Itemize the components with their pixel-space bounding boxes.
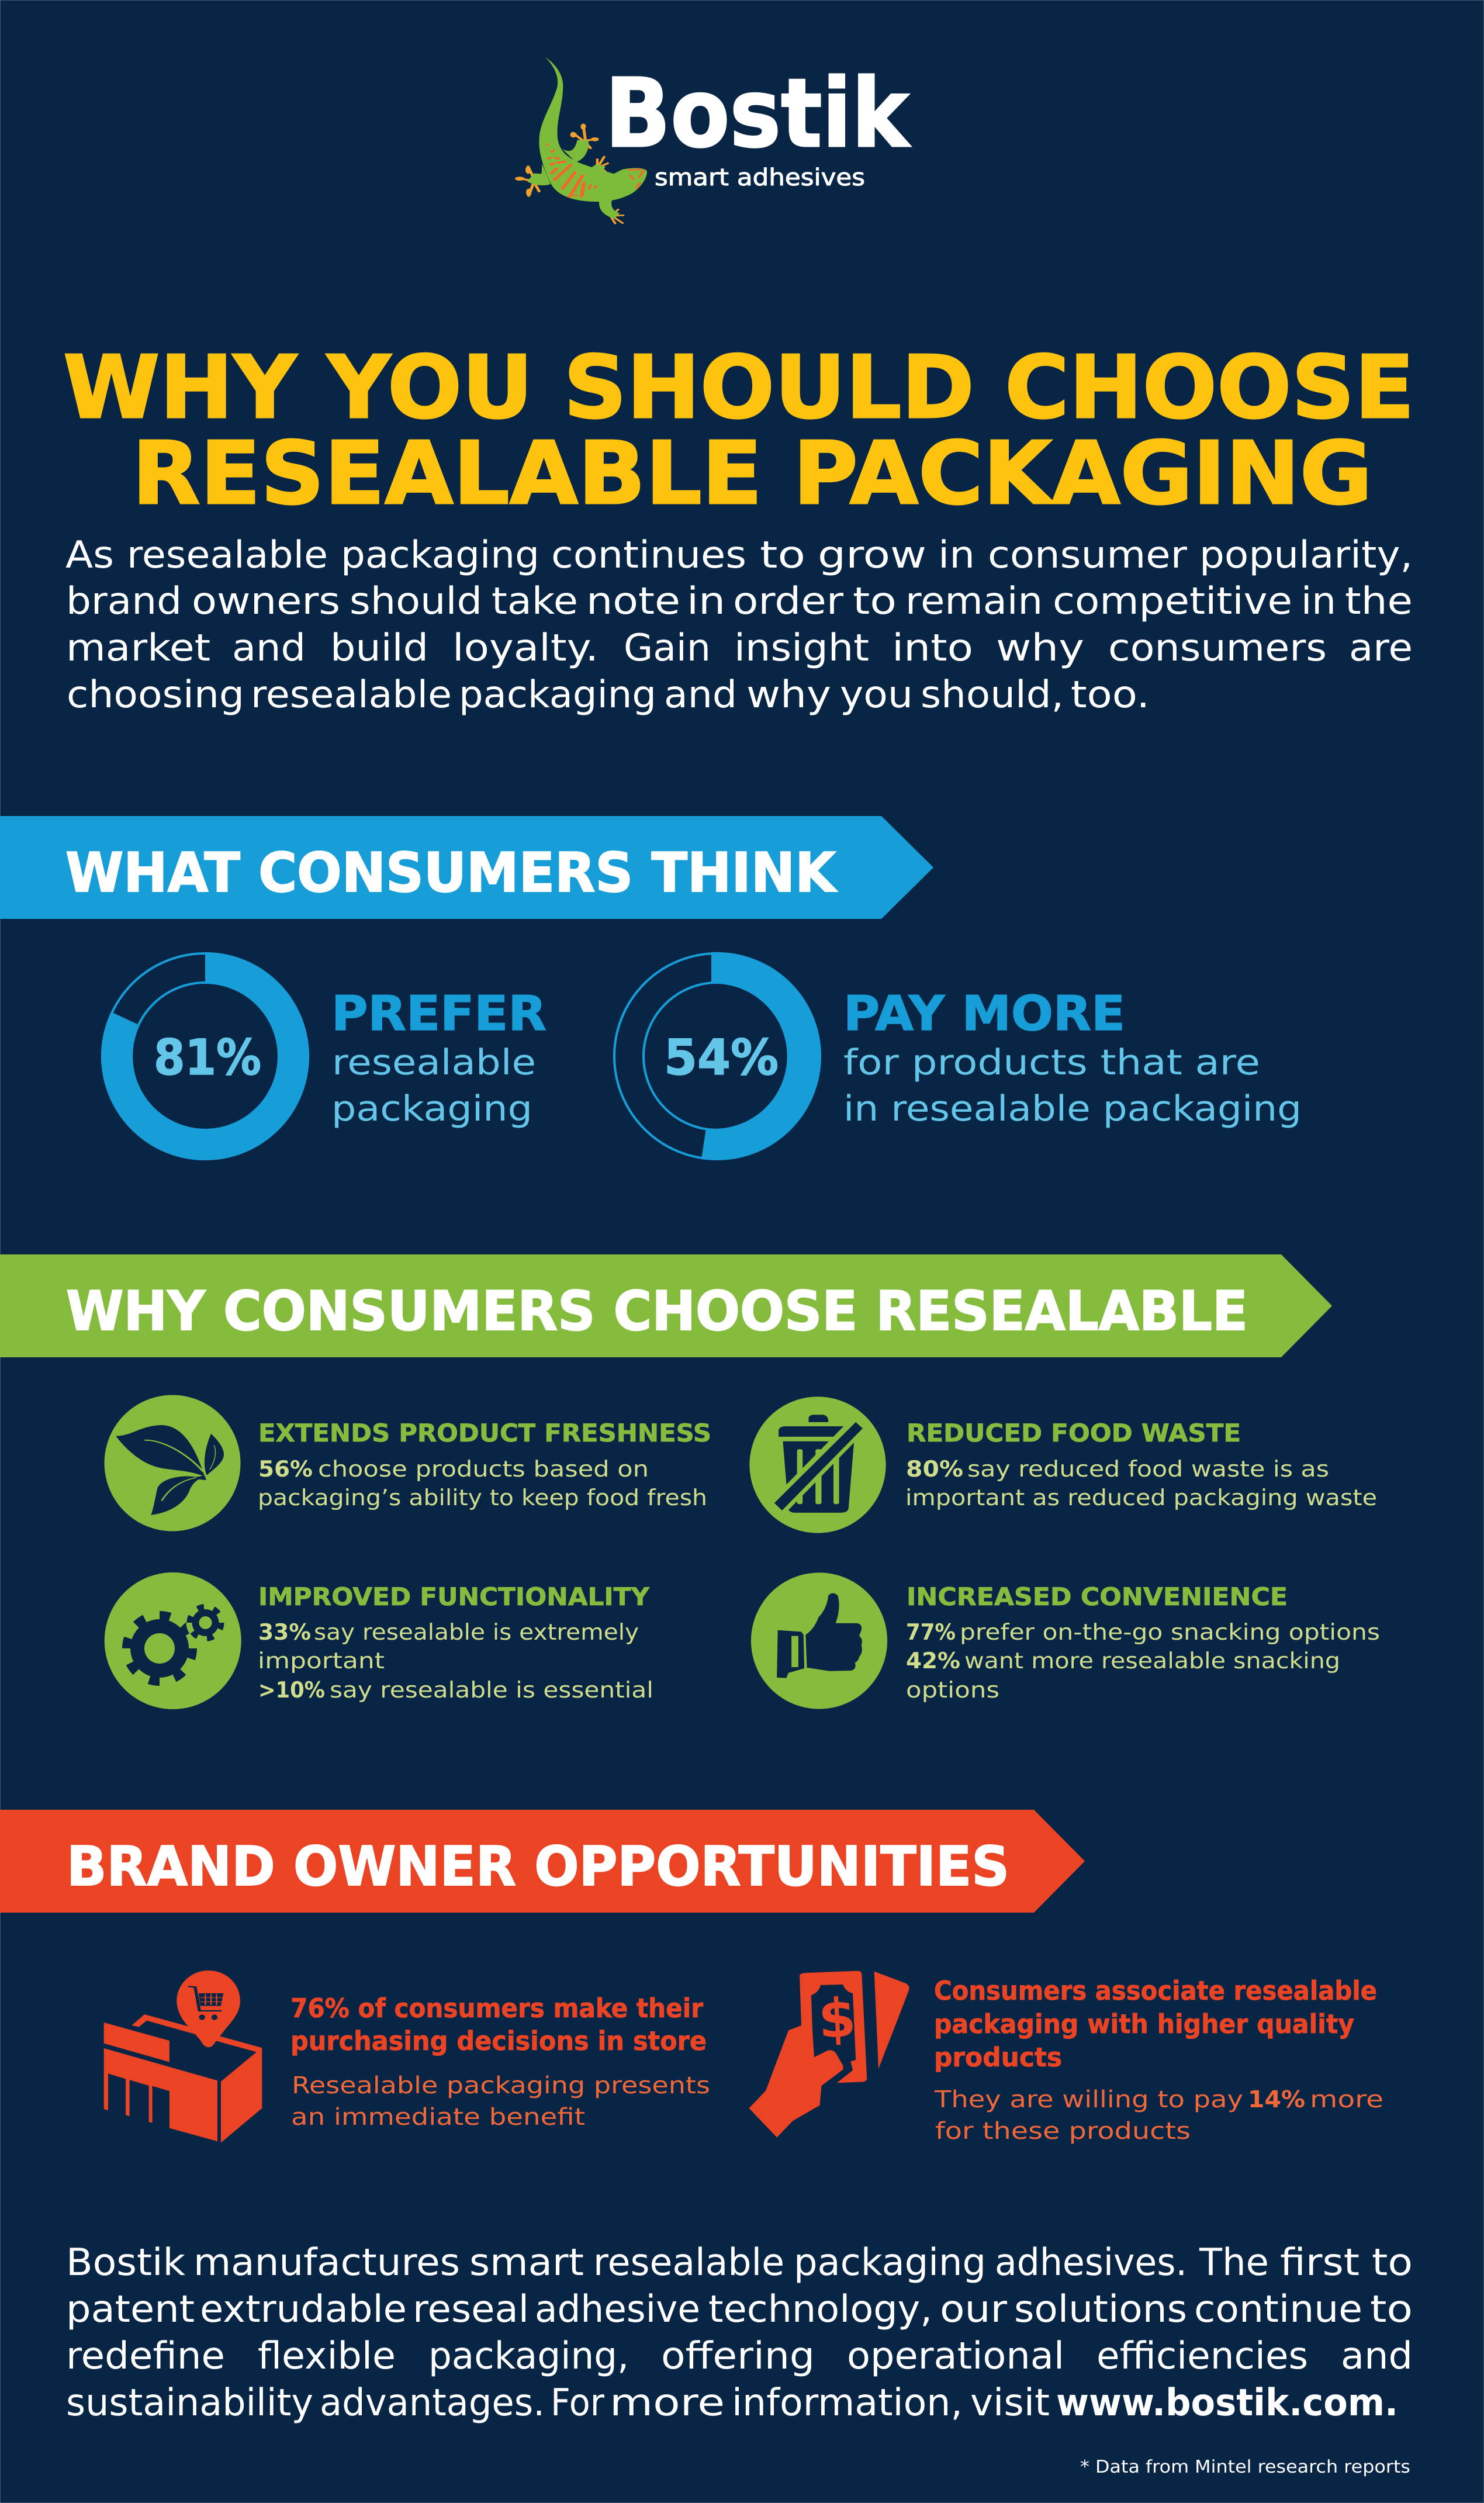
text: improved functionality: >10% [258,1677,325,1703]
closing paragraph [66,2241,1413,2425]
panel: prefer stat [101,952,546,1160]
intro paragraph: the [1345,580,1413,623]
text: quality association: for these products [935,2118,1191,2145]
closing paragraph: packaging [794,2241,986,2284]
closing paragraph: first [1280,2241,1360,2284]
closing paragraph: efficiencies [1096,2335,1308,2378]
intro paragraph: should, [921,673,1064,717]
intro paragraph: competitive [1053,580,1292,623]
text: in store decisions: an immediate benefit [291,2104,585,2131]
text: quality association: 14% [1248,2086,1305,2113]
intro paragraph: to [760,534,805,577]
intro paragraph: and [664,673,737,717]
intro paragraph: grow [818,534,926,577]
text: improved functionality: say resealable is essential [330,1677,653,1703]
intro paragraph: brand [66,580,182,623]
intro paragraph: consumers [1108,627,1327,670]
intro paragraph: owners [192,580,340,623]
stat label: pay more [843,986,1302,1129]
intro paragraph: into [892,627,973,670]
text: reduced food waste: important as reduced packaging waste [905,1485,1377,1510]
intro paragraph: continues [551,534,746,577]
text: increased convenience: 42% [906,1648,960,1674]
text: extends product freshness: packaging’s ability to keep food fresh [258,1485,707,1510]
intro paragraph: should [350,580,482,623]
closing paragraph: more [610,2381,725,2425]
panel: increased convenience [751,1572,1380,1709]
closing paragraph: information, [732,2381,963,2425]
panel: reduced food waste [749,1396,1377,1533]
section banner: what consumers think [0,816,933,919]
text: improved functionality: say resealable is extremely [314,1619,639,1645]
intro paragraph: insight [734,627,869,670]
icon: crossed out trash can [749,1396,886,1533]
text: increased convenience: want more resealable snacking [964,1648,1340,1674]
section banner: why consumers choose resealable: WHY CONSUMERS CHOOSE RESEALABLE [66,1280,1248,1343]
text: in store decisions: purchasing decisions in store [290,2025,707,2056]
closing paragraph: patent [66,2288,195,2331]
intro paragraph: you [840,673,913,717]
section banner: brand owner opportunities: BRAND OWNER OPPORTUNITIES [67,1835,1009,1898]
intro paragraph: in [938,534,975,577]
closing paragraph: to [1370,2288,1413,2331]
closing paragraph: The [1199,2241,1269,2284]
closing paragraph: advantages. [320,2381,545,2425]
closing paragraph: For [551,2381,605,2425]
closing paragraph: adhesive [535,2288,700,2331]
intro paragraph: resealable [251,673,452,717]
text: improved functionality: IMPROVED FUNCTIONALITY [258,1582,650,1611]
title [63,337,1414,524]
text: quality association: products [934,2042,1062,2073]
text: reduced food waste: say reduced food waste is as [967,1456,1329,1482]
closing paragraph: smart [469,2241,584,2284]
text: in store decisions: Resealable packaging presents [292,2072,710,2099]
closing paragraph: manufactures [193,2241,460,2284]
section banner: why consumers choose resealable [0,1254,1332,1357]
intro paragraph: why [746,673,831,717]
title: WHY YOU SHOULD CHOOSE [63,337,1414,438]
wordmark: Bostik [605,59,911,169]
text: increased convenience: INCREASED CONVENIENCE [907,1582,1288,1611]
icon: thumbs up [751,1572,887,1709]
footnote: * Data from Mintel research reports [1080,2457,1410,2477]
closing paragraph: sustainability [66,2381,313,2425]
stat label: pay more: in resealable packaging [843,1088,1302,1129]
text: reduced food waste: 80% [906,1456,963,1482]
text: quality association: more [1310,2086,1383,2113]
intro paragraph: build [330,627,428,670]
section banner: brand owner opportunities [0,1810,1085,1913]
text: reduced food waste: REDUCED FOOD WASTE [907,1419,1241,1447]
panel: higher quality association [749,1971,1383,2145]
panel: purchasing decisions in store [104,1970,710,2143]
title: RESEALABLE PACKAGING [132,423,1372,524]
closing paragraph: adhesives. [995,2241,1187,2284]
text: reduced food waste [905,1419,1377,1510]
text: increased convenience: prefer on-the-go snacking options [960,1619,1380,1645]
section banner: what consumers think: WHAT CONSUMERS THINK [65,841,838,904]
tagline: smart adhesives [655,164,865,191]
panel: pay more stat [614,952,1302,1160]
stat label: prefer: resealable [332,1042,536,1083]
closing paragraph: offering [661,2335,815,2378]
closing paragraph: reseal [413,2288,529,2331]
stat label: prefer [331,986,546,1129]
closing paragraph: Bostik [66,2241,185,2284]
icon: hand holding money: $ [817,1986,857,2051]
intro paragraph: popularity, [1199,534,1413,577]
panel: extends product freshness [104,1395,711,1531]
closing paragraph: extrudable [200,2288,407,2331]
text: quality association: They are willing to pay [934,2086,1243,2113]
donut chart: 81%: 81% [154,1029,261,1086]
closing paragraph: continue [1194,2288,1362,2331]
intro paragraph: order [733,580,844,623]
icon: store with shopping cart pin [104,1970,262,2143]
intro paragraph: As [65,534,114,577]
closing paragraph: technology, [708,2288,932,2331]
intro paragraph: consumer [988,534,1188,577]
intro paragraph: market [66,627,210,670]
stat label: prefer: PREFER [331,986,546,1042]
text: extends product freshness: 56% [258,1456,313,1482]
text: extends product freshness [258,1419,711,1510]
icon: gears [105,1572,241,1709]
text: in store decisions [290,1993,710,2131]
text: improved functionality: important [258,1648,385,1674]
closing paragraph: packaging, [428,2335,629,2378]
intro paragraph: choosing [67,673,244,717]
closing paragraph: visit [970,2381,1050,2425]
intro paragraph [65,534,1413,717]
intro paragraph: Gain [624,627,711,670]
icon: leaves [104,1395,241,1531]
intro paragraph: loyalty. [452,627,599,670]
intro paragraph: in [687,580,725,623]
text: quality association [934,1975,1383,2145]
text: increased convenience: 77% [906,1619,956,1645]
donut chart: 54%: 54% [664,1029,779,1086]
text: quality association: Consumers associate resealable [934,1975,1377,2006]
closing paragraph: flexible [258,2335,396,2378]
closing paragraph: to [1372,2241,1413,2284]
intro paragraph: remain [905,580,1043,623]
text: improved functionality: 33% [258,1619,311,1645]
text: in store decisions: 76% of consumers make their [290,1993,704,2024]
intro paragraph: packaging [341,534,539,577]
closing paragraph: operational [847,2335,1064,2378]
icon: hand holding money [749,1971,909,2138]
intro paragraph: why [996,627,1084,670]
logo: Bostik gecko and wordmark [515,57,911,223]
stat label: prefer: packaging [331,1088,532,1129]
closing paragraph: and [1341,2335,1413,2378]
closing paragraph: solutions [1014,2288,1187,2331]
intro paragraph: and [232,627,306,670]
closing paragraph: redefine [66,2335,225,2378]
text: extends product freshness: EXTENDS PRODUCT FRESHNESS [258,1419,711,1447]
donut chart: 54% [614,952,820,1160]
panel: improved functionality [105,1572,653,1709]
closing paragraph: resealable [593,2241,784,2284]
intro paragraph: too. [1071,673,1150,717]
donut chart: 81% [101,952,309,1160]
text: increased convenience: options [906,1677,999,1703]
text: quality association: packaging with higher quality [934,2008,1354,2039]
intro paragraph: in [1301,580,1336,623]
intro paragraph: note [586,580,680,623]
intro paragraph: take [492,580,578,623]
text: increased convenience [906,1582,1380,1703]
closing paragraph: our [940,2288,1008,2331]
text: improved functionality [258,1582,653,1703]
closing paragraph: www.bostik.com. [1056,2381,1398,2425]
stat label: pay more: PAY MORE [843,986,1125,1042]
stat label: pay more: for products that are [843,1042,1260,1083]
intro paragraph: to [853,580,897,623]
intro paragraph: packaging [459,673,656,717]
icon: gecko [515,57,647,223]
text: extends product freshness: choose products based on [318,1456,649,1482]
intro paragraph: are [1349,627,1413,670]
intro paragraph: resealable [127,534,328,577]
